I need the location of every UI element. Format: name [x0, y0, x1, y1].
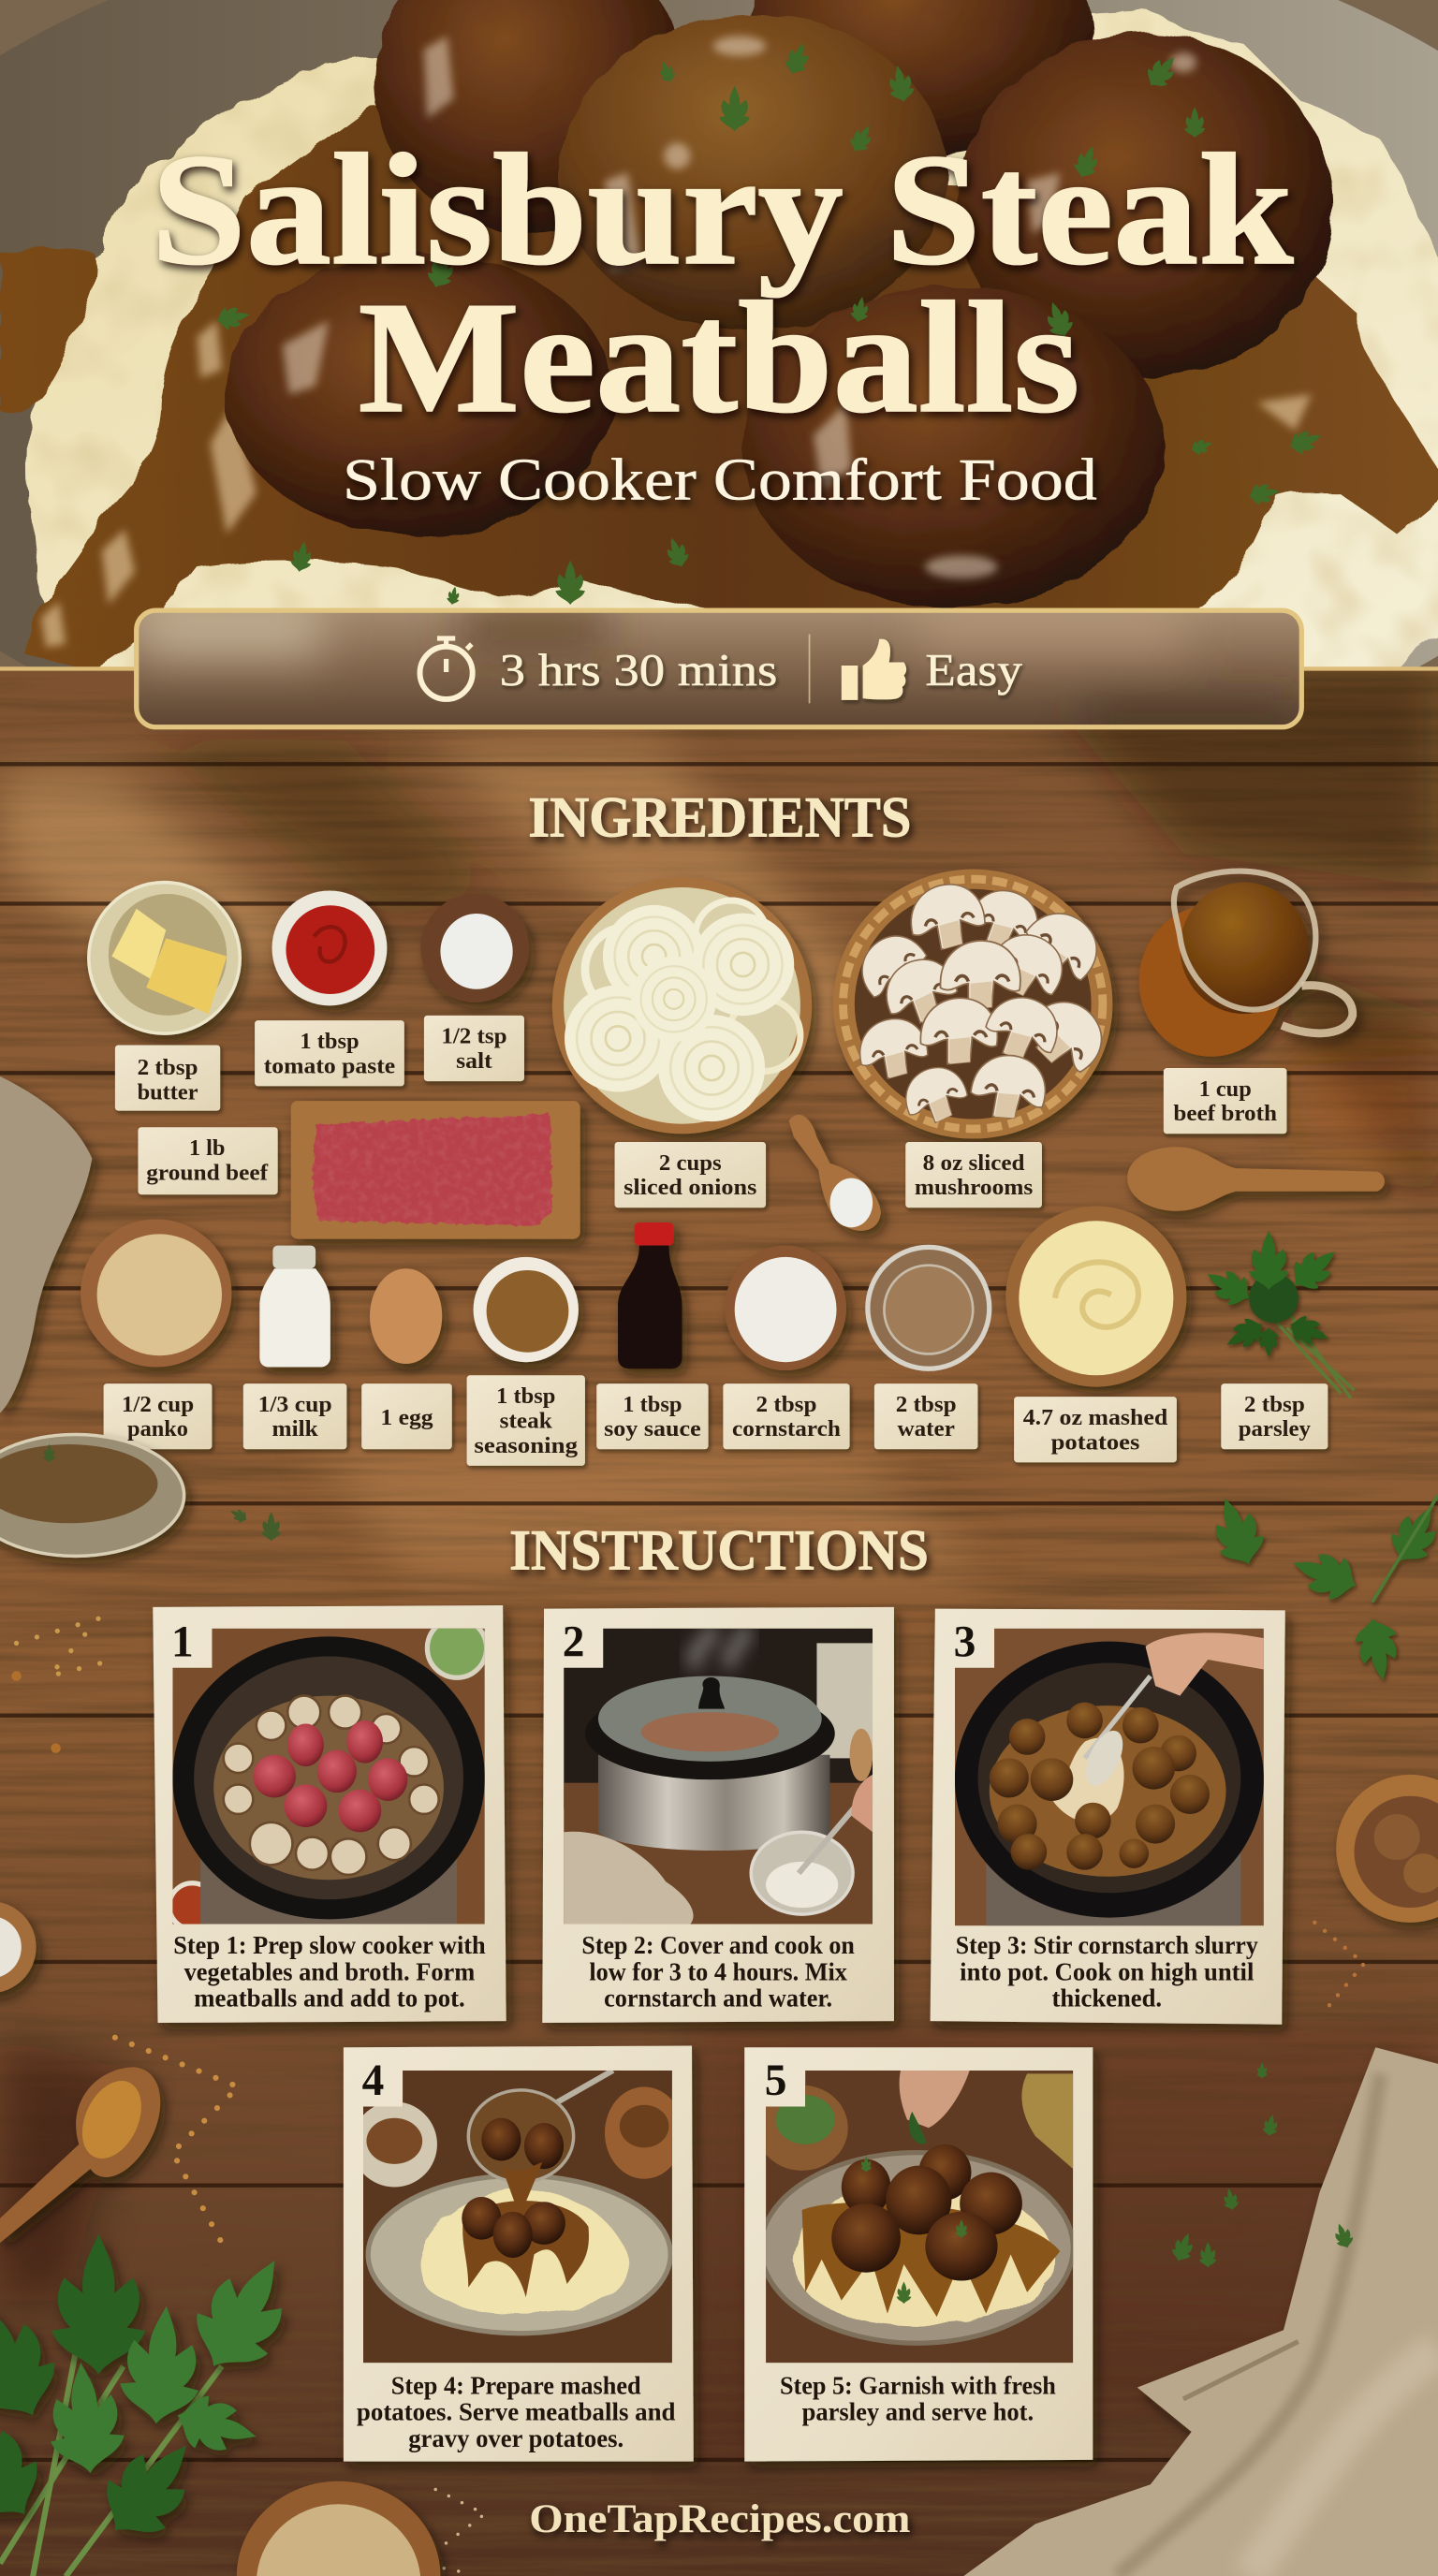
label: butter: butter — [138, 1079, 198, 1105]
hero photo: meatballs over mashed potatoes — [0, 0, 1438, 666]
step 2 photo: covered slow cooker — [564, 1627, 873, 1925]
label: sliced onions: 2 cups — [659, 1150, 722, 1176]
decoration: left salt bowl — [0, 1901, 37, 1993]
label: salt: 1/2 tsp — [441, 1024, 507, 1049]
gravy highlights — [41, 320, 1312, 648]
decoration: small herb flecks — [43, 1444, 281, 1542]
ingredient: cornstarch — [725, 1246, 846, 1370]
step 1 text: meatballs and add to pot. — [194, 1983, 465, 2012]
step 2 text: cornstarch and water. — [604, 1983, 832, 2012]
decoration: glass dish left — [0, 1434, 184, 1556]
label: salt: salt — [456, 1048, 493, 1074]
glossy highlights — [283, 37, 1196, 578]
label: egg — [361, 1383, 452, 1449]
gravy pool — [0, 98, 1438, 670]
step 3 photo: stirring cornstarch slurry — [955, 1629, 1264, 1925]
label: beef broth: 1 cup — [1199, 1076, 1252, 1102]
label: tomato paste: 1 tbsp — [300, 1029, 360, 1054]
decoration: parsley branch bottom-left — [0, 2234, 310, 2576]
decoration: scattered parsley flecks right — [1169, 2062, 1356, 2267]
label: water: 2 tbsp — [896, 1392, 957, 1417]
step 1 text — [173, 1931, 486, 2012]
gold divider lines beside the time bar — [0, 667, 1438, 670]
title — [151, 121, 1294, 446]
label: water: water — [897, 1416, 955, 1442]
step 2 text: low for 3 to 4 hours. Mix — [589, 1957, 847, 1985]
step card 4 — [344, 2046, 694, 2462]
step 3 text: Step 3: Stir cornstarch slurry — [956, 1931, 1258, 1959]
step number 5: 5 — [765, 2056, 786, 2105]
ingredient: sliced mushrooms in basket — [833, 870, 1116, 1139]
step 5 photo: garnishing with parsley — [756, 2071, 1073, 2363]
step card 1 — [153, 1605, 506, 2023]
decoration: bowl of panko bottom — [237, 2481, 440, 2576]
step 3 text: into pot. Cook on high until — [960, 1957, 1255, 1985]
subtitle: Slow Cooker Comfort Food — [343, 447, 1097, 513]
step number 4: 4 — [362, 2056, 384, 2105]
label: parsley: parsley — [1239, 1416, 1312, 1442]
icon: wooden spoon with salt — [789, 1115, 881, 1231]
wood table background — [0, 666, 1438, 2576]
label: ground beef: ground beef — [146, 1160, 269, 1185]
label: panko — [104, 1383, 212, 1449]
step 5 text — [780, 2372, 1056, 2426]
step 5 text: Step 5: Garnish with fresh — [780, 2372, 1056, 2400]
label: mashed potatoes: 4.7 oz mashed — [1023, 1405, 1168, 1430]
footer website: OneTapRecipes.com — [529, 2496, 911, 2541]
step 2 text: Step 2: Cover and cook on — [581, 1931, 855, 1959]
decoration: right spice bowl — [1336, 1775, 1438, 1923]
step 4 photo: ladling meatballs over potatoes — [352, 2071, 683, 2363]
label: cornstarch: 2 tbsp — [756, 1392, 816, 1417]
step 1 text: vegetables and broth. Form — [184, 1957, 476, 1985]
label: salt — [424, 1016, 524, 1081]
label: steak seasoning: seasoning — [474, 1433, 579, 1458]
decoration: herb sprigs right — [1203, 1490, 1438, 1684]
heading: ingredients: INGREDIENTS — [528, 786, 911, 850]
label: parsley — [1221, 1383, 1328, 1449]
label: panko: panko — [127, 1416, 188, 1442]
title: Salisbury Steak — [151, 121, 1294, 298]
decoration: spice crumbs — [17, 1618, 1364, 2571]
ingredient: soy sauce bottle — [618, 1222, 682, 1368]
label: tomato paste: tomato paste — [264, 1053, 395, 1078]
ingredient: ground beef on board — [291, 1101, 580, 1239]
label: water — [874, 1383, 977, 1449]
label: ground beef — [138, 1127, 278, 1194]
label: parsley: 2 tbsp — [1244, 1392, 1305, 1417]
ingredient: tomato paste — [272, 890, 387, 1005]
label: beef broth — [1164, 1068, 1287, 1134]
step 4 text — [357, 2372, 675, 2452]
label: steak seasoning: steak — [500, 1408, 552, 1433]
step 4 text: Step 4: Prepare mashed — [391, 2372, 641, 2400]
label: sliced mushrooms — [905, 1142, 1042, 1208]
step number 1: 1 — [171, 1617, 194, 1666]
icon: thumbs up — [842, 639, 906, 700]
ingredient: egg — [370, 1268, 442, 1364]
label: soy sauce: soy sauce — [604, 1416, 701, 1442]
label: sliced mushrooms: mushrooms — [915, 1175, 1033, 1200]
label: sliced onions — [615, 1142, 766, 1208]
label: milk: 1/3 cup — [258, 1392, 332, 1417]
ingredient: salt — [420, 894, 529, 1003]
ingredient: parsley bunch — [1199, 1231, 1354, 1398]
label: milk — [243, 1383, 346, 1449]
label: mashed potatoes — [1014, 1397, 1177, 1462]
label: panko: 1/2 cup — [122, 1392, 194, 1417]
label: cornstarch — [723, 1383, 850, 1449]
step 4 text: gravy over potatoes. — [408, 2424, 624, 2452]
step number 2: 2 — [563, 1617, 584, 1666]
label: beef broth: beef broth — [1173, 1101, 1277, 1126]
decoration: linen towel bottom-right — [963, 2047, 1438, 2576]
label: soy sauce — [596, 1383, 709, 1449]
label: butter: 2 tbsp — [138, 1055, 198, 1080]
ingredient: mashed potatoes bowl — [1005, 1206, 1186, 1387]
ingredient: butter — [89, 883, 240, 1033]
step card 3 — [931, 1609, 1285, 2025]
title: Meatballs — [359, 269, 1079, 446]
step 5 text: parsley and serve hot. — [802, 2398, 1034, 2426]
parsley flecks — [215, 39, 1325, 606]
mashed potato mound — [29, 13, 1438, 677]
label: cornstarch: cornstarch — [732, 1416, 841, 1442]
label: soy sauce: 1 tbsp — [623, 1392, 682, 1417]
label: ground beef: 1 lb — [189, 1135, 225, 1161]
step 3 text: thickened. — [1051, 1983, 1162, 2012]
step card 5 — [744, 2047, 1093, 2462]
ingredient: sliced onions — [552, 877, 812, 1134]
step 2 text — [581, 1931, 855, 2012]
time and difficulty bar — [134, 608, 1304, 730]
label: steak seasoning — [467, 1375, 585, 1466]
ingredient: beef broth jug — [1139, 871, 1353, 1057]
label: steak seasoning: 1 tbsp — [496, 1383, 555, 1409]
time text: 3 hrs 30 mins — [500, 644, 777, 695]
step 1 photo: meatballs in slow cooker — [169, 1618, 487, 1929]
icon: stopwatch — [420, 638, 473, 699]
label: sliced onions: sliced onions — [624, 1175, 756, 1200]
decoration: wooden spoon with crumbs — [0, 2067, 160, 2243]
ingredient: steak seasoning — [474, 1257, 579, 1362]
label: butter — [115, 1045, 220, 1111]
label: sliced mushrooms: 8 oz sliced — [923, 1150, 1025, 1176]
ingredient: water glass bowl — [868, 1247, 990, 1368]
step number 3: 3 — [954, 1617, 976, 1666]
ingredient: milk bottle — [259, 1246, 330, 1368]
difficulty text: Easy — [925, 644, 1022, 695]
icon: large wooden spoon — [1127, 1147, 1385, 1211]
label: milk: milk — [272, 1416, 318, 1442]
label: tomato paste — [255, 1020, 404, 1086]
step 3 text — [956, 1931, 1258, 2012]
step 4 text: potatoes. Serve meatballs and — [357, 2398, 675, 2426]
linen cloth left — [0, 1076, 92, 1413]
step card 2 — [542, 1607, 894, 2023]
step 1 text: Step 1: Prep slow cooker with — [173, 1931, 486, 1959]
meatballs — [225, 0, 1333, 608]
heading: instructions: INSTRUCTIONS — [509, 1518, 929, 1582]
label: egg: 1 egg — [380, 1405, 433, 1430]
label: mashed potatoes: potatoes — [1051, 1429, 1139, 1455]
ingredient: panko — [81, 1220, 232, 1368]
